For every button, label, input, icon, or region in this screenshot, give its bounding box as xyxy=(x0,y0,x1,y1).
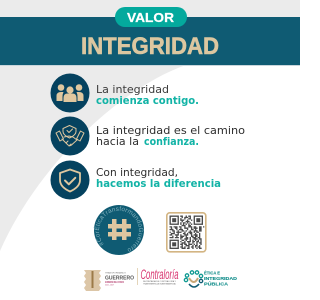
item 3 xyxy=(50,160,221,200)
icon: handshake with shield xyxy=(50,116,90,156)
emblem xyxy=(84,270,101,291)
logo: Ética e Integridad Pública: INTEGRIDAD xyxy=(204,276,237,281)
logo: Guerrero: TRANSFORMANDO xyxy=(105,272,126,274)
item 1 xyxy=(50,74,199,112)
logo: Ética e Integridad Pública: ÉTICA E xyxy=(204,270,220,276)
item 3 text: hacemos la diferencia xyxy=(96,178,221,190)
icon: shield check xyxy=(50,160,90,200)
logo: Contraloría: SECRETARÍA DE CONTRALORÍA Y xyxy=(143,280,177,283)
item 2 text xyxy=(96,125,245,148)
QR code xyxy=(167,213,206,252)
logo: Guerrero xyxy=(84,268,138,291)
emblem xyxy=(184,271,203,287)
item 1 text: La integridad xyxy=(96,84,169,96)
item 2 text: La integridad es el camino xyxy=(96,125,245,137)
item 1 text: comienza contigo. xyxy=(96,95,199,107)
item 1 text xyxy=(96,84,199,107)
item 2 text: confianza. xyxy=(144,136,199,148)
logo: Contraloría: TRANSPARENCIA GUBERNAMENTAL xyxy=(143,282,176,286)
logo: Guerrero: GUERRERO xyxy=(105,276,135,282)
value pill xyxy=(115,7,187,27)
logo: Contraloría: Contraloría xyxy=(140,267,179,282)
item 3 text: Con integridad, xyxy=(96,167,178,179)
value pill: VALOR xyxy=(127,10,175,25)
logo: Contraloría xyxy=(140,267,179,286)
logo: Ética e Integridad Pública xyxy=(184,270,237,287)
item 2 xyxy=(50,116,245,156)
item 3 text xyxy=(96,167,221,190)
logo: Ética e Integridad Pública: PÚBLICA xyxy=(204,282,228,286)
logo: Guerrero: 2021 - 2027 xyxy=(105,285,115,287)
logo: Guerrero: GOBIERNO DEL ESTADO xyxy=(105,281,124,284)
item 2 text: hacia la xyxy=(96,136,139,148)
hashtag badge: #CorÉticaTransformandoGuerrero xyxy=(94,206,144,252)
icon: people xyxy=(50,74,90,112)
title: INTEGRIDAD xyxy=(81,33,219,60)
banner xyxy=(0,7,300,66)
